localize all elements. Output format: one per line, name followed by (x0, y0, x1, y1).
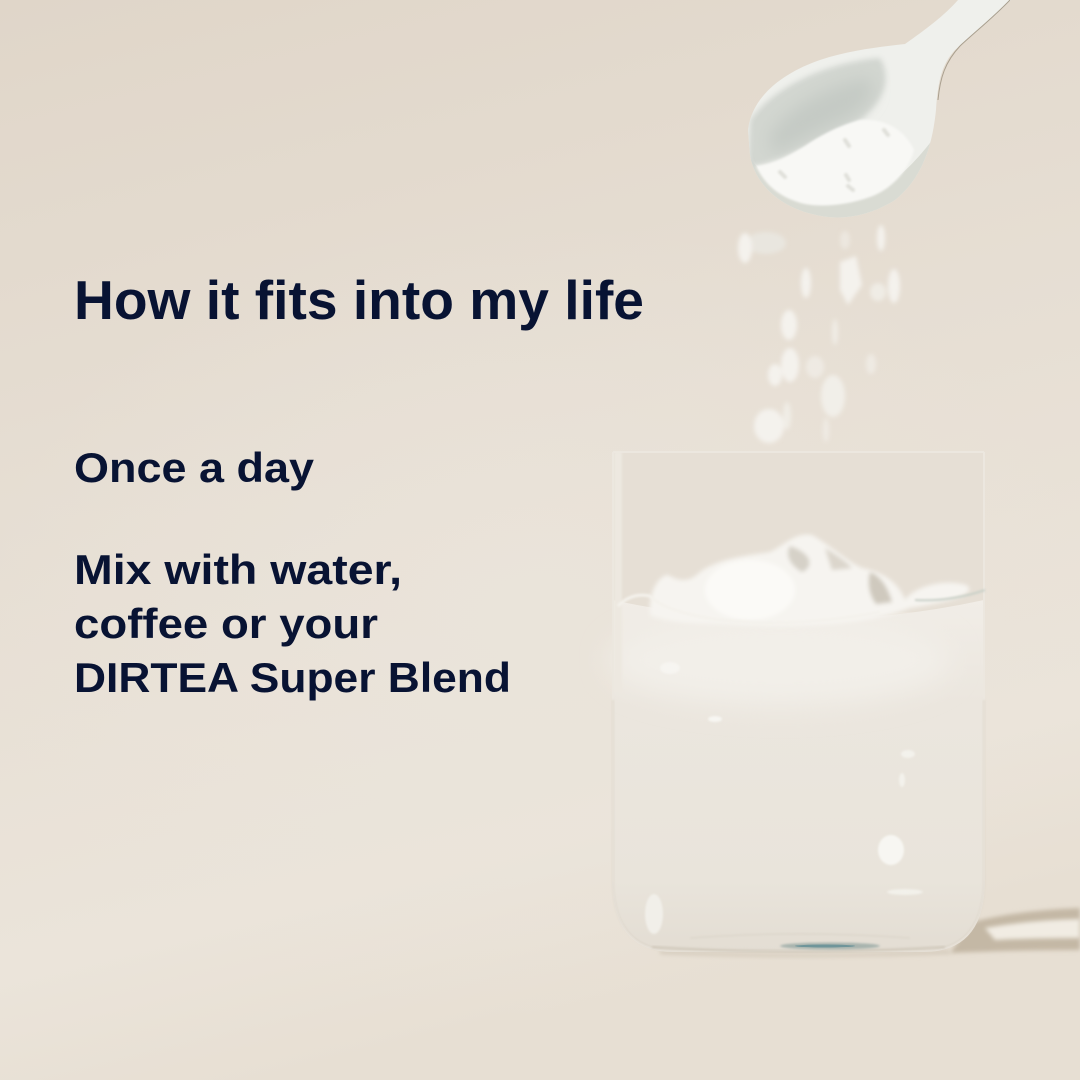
powder mound (650, 535, 969, 626)
base of the glass (690, 934, 910, 938)
spoon body and handle (740, 0, 1020, 225)
falling powder particles (738, 225, 900, 529)
cloudy powder in water (610, 615, 950, 705)
spoon underside (752, 143, 930, 218)
mound shadows (788, 546, 809, 572)
glass edges (613, 452, 984, 951)
frequency text: Once a day (74, 444, 315, 491)
bowl interior shading (748, 58, 886, 166)
glass shadow on the surface (660, 908, 1080, 957)
usage instructions: coffee or your (74, 600, 378, 647)
water surface line (618, 595, 880, 623)
powder clumps in water (645, 662, 923, 934)
usage instructions (74, 546, 511, 701)
right wall shadow (983, 620, 985, 680)
left glass wall highlight (614, 452, 622, 692)
powder in spoon (756, 120, 914, 206)
usage instructions: DIRTEA Super Blend (74, 654, 511, 701)
water body (612, 600, 984, 951)
drinking glass with water (610, 452, 985, 952)
glass body above water (612, 452, 984, 612)
handle shadow edge (938, 0, 1010, 100)
spoon with powder (740, 0, 1020, 225)
title: How it fits into my life (74, 270, 644, 331)
iridescent reflection (780, 942, 880, 950)
usage instructions: Mix with water, (74, 546, 402, 593)
